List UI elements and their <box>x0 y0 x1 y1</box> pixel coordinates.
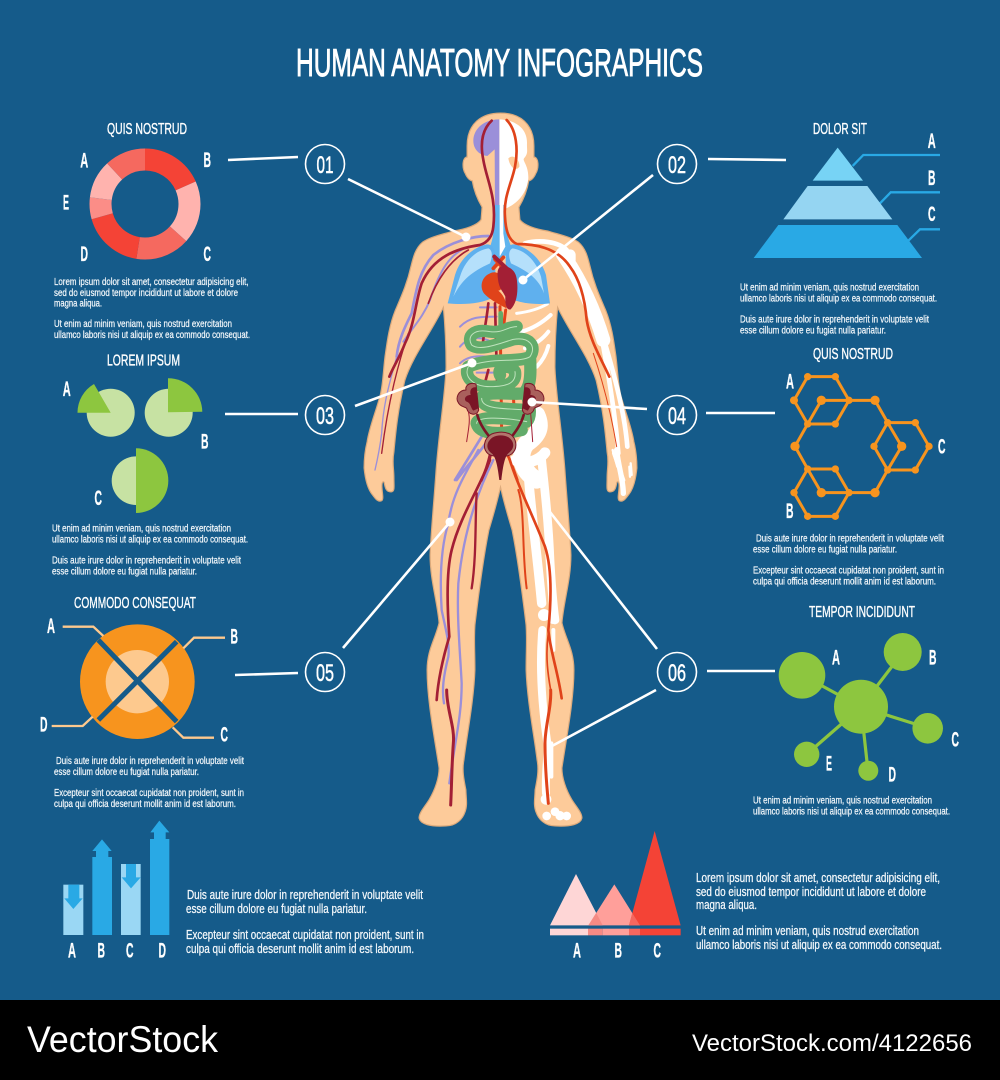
text block <box>186 888 424 956</box>
text block: Duis aute irure dolor in reprehenderit in voluptate velit <box>56 756 244 767</box>
body skin <box>365 114 636 825</box>
bar labels: B <box>98 940 105 962</box>
text block: Duis aute irure dolor in reprehenderit in voluptate velit <box>187 888 423 902</box>
panel: quis nostrud donut: C <box>204 243 211 266</box>
text block: esse cillum dolore eu fugiat nulla pariatur. <box>52 566 197 578</box>
triangle labels: B <box>614 940 622 962</box>
text block: magna aliqua. <box>696 898 757 912</box>
pyramid chart <box>754 148 940 258</box>
circle labels: C <box>220 724 228 746</box>
text block: Excepteur sint occaecat cupidatat non proident, sunt in <box>54 788 244 799</box>
text block: esse cillum dolore eu fugiat nulla pariatur. <box>186 902 367 916</box>
hexagon labels <box>786 370 946 523</box>
circle labels <box>40 615 238 746</box>
circle labels: A <box>47 615 55 638</box>
pie B <box>145 378 202 437</box>
footer watermark: VectorStock.com/4122656 <box>692 1030 972 1057</box>
text block: Excepteur sint occaecat cupidatat non proident, sunt in <box>753 566 944 576</box>
text block <box>54 277 250 341</box>
text block: Ut enim ad minim veniam, quis nostrud exercitation <box>54 319 232 330</box>
trunk vessels <box>460 307 498 383</box>
heading: COMMODO CONSEQUAT <box>74 595 196 612</box>
text block: culpa qui officia deserunt mollit anim id est laborum. <box>186 942 414 956</box>
left leg veins <box>441 450 478 703</box>
right leg arteries <box>509 458 562 698</box>
right arm bones <box>525 241 567 250</box>
bar labels: C <box>126 940 134 962</box>
upper body organs and vessels <box>375 119 632 480</box>
panel: tempor incididunt molecule <box>753 604 959 818</box>
text block: Ut enim ad minim veniam, quis nostrud exercitation <box>740 282 919 294</box>
text block: Excepteur sint occaecat cupidatat non proident, sunt in <box>186 928 424 942</box>
donut labels: E <box>63 192 69 214</box>
text block <box>54 756 244 810</box>
left arm arteries <box>389 121 494 377</box>
number badge 06 <box>658 652 696 692</box>
pie labels <box>63 378 209 510</box>
pyramid labels: A <box>928 130 936 153</box>
heading: QUIS NOSTRUD <box>107 121 187 138</box>
brain and purple vein <box>473 119 499 210</box>
connector 03 <box>225 358 476 414</box>
intestines <box>467 313 533 433</box>
heart <box>482 257 517 310</box>
text block: ullamco laboris nisi ut aliquip ex ea commodo consequat. <box>54 330 250 341</box>
molecule labels: D <box>888 764 896 786</box>
heading: DOLOR SIT <box>813 121 867 138</box>
connector lines and markers <box>225 157 786 746</box>
panel: dolor sit pyramid <box>740 121 940 336</box>
text block <box>696 871 942 952</box>
text block: sed do eiusmod tempor incididunt ut labore et dolore <box>696 885 926 899</box>
number badge 03: 03 <box>316 403 334 430</box>
connector 01 <box>228 157 470 242</box>
right lung <box>506 244 550 304</box>
title: HUMAN ANATOMY INFOGRAPHICS <box>296 42 703 85</box>
molecule labels: E <box>826 752 832 776</box>
panel: arrow bar chart: D <box>158 940 166 962</box>
heading: QUIS NOSTRUD <box>813 346 893 363</box>
quartered circle <box>52 624 225 739</box>
number badge 06: 06 <box>668 660 686 687</box>
left kidney <box>457 383 491 442</box>
skull bone <box>499 119 528 211</box>
spinal cord <box>488 205 513 260</box>
panel: triangle chart: C <box>654 940 661 962</box>
pelvis bone <box>522 415 539 480</box>
number badge 02: 02 <box>668 152 686 179</box>
panel: lorem ipsum pies <box>52 352 248 578</box>
panel: commodo consequat circle: B <box>230 626 238 648</box>
text block: sed do eiusmod tempor incididunt ut labore et dolore <box>54 288 238 299</box>
text block: esse cillum dolore eu fugiat nulla pariatur. <box>753 544 897 556</box>
number badge 03 <box>306 396 344 434</box>
left lung <box>448 244 495 304</box>
right arm arteries <box>505 120 609 377</box>
skull hole <box>508 157 519 169</box>
molecule diagram <box>779 633 943 781</box>
heading: TEMPOR INCIDIDUNT <box>809 604 915 621</box>
left arm veins <box>397 236 488 357</box>
text block <box>740 282 937 336</box>
ribs <box>517 304 547 313</box>
infographic canvas: C <box>952 728 959 752</box>
circle labels: D <box>40 714 48 736</box>
bar labels: A <box>68 940 76 962</box>
footer watermark: VectorStock <box>27 1019 218 1060</box>
hexagon labels: B <box>786 500 794 523</box>
molecule labels: A <box>832 646 840 670</box>
text block: Ut enim ad minim veniam, quis nostrud exercitation <box>52 524 231 534</box>
number badge 05 <box>306 652 344 692</box>
bar labels <box>68 940 166 962</box>
number badge 04 <box>658 396 696 434</box>
text block: Lorem ipsum dolor sit amet, consectetur adipisicing elit, <box>696 871 940 885</box>
panel: triangle chart <box>550 831 942 962</box>
text block: Duis aute irure dolor in reprehenderit in voluptate velit <box>52 556 241 566</box>
text block: Lorem ipsum dolor sit amet, consectetur adipisicing elit, <box>54 277 248 288</box>
text block <box>753 534 944 588</box>
hexagon labels: A <box>786 370 794 394</box>
number badge 02 <box>658 144 696 184</box>
panel: commodo consequat circle <box>40 595 244 810</box>
donut labels <box>63 149 211 266</box>
hexagon network <box>790 373 933 520</box>
right kidney <box>510 383 544 442</box>
lower body vessels and bones <box>437 450 630 820</box>
triangles and base bar <box>550 831 681 935</box>
number badge 01: 01 <box>316 152 334 179</box>
triangle labels <box>573 940 661 962</box>
text block: Ut enim ad minim veniam, quis nostrud exercitation <box>696 924 919 938</box>
infographic canvas: C <box>938 436 946 458</box>
right leg bones <box>515 450 630 820</box>
text block: esse cillum dolore eu fugiat nulla pariatur. <box>54 767 199 778</box>
text block: Duis aute irure dolor in reprehenderit in voluptate velit <box>740 314 929 326</box>
connector 04 <box>528 398 775 413</box>
panel: arrow bar chart <box>63 821 424 962</box>
panel: quis nostrud hexagons <box>753 346 946 588</box>
panel: quis nostrud donut <box>54 121 250 341</box>
pie labels: A <box>63 378 71 401</box>
bladder <box>484 432 516 480</box>
panel: lorem ipsum pies: B <box>201 430 208 454</box>
number badge 04: 04 <box>668 403 686 430</box>
text block: esse cillum dolore eu fugiat nulla pariatur. <box>740 326 886 336</box>
human body figure <box>365 114 636 825</box>
pie C <box>112 448 168 513</box>
text block <box>753 796 950 818</box>
number badge 05: 05 <box>316 660 334 687</box>
number badge 01 <box>306 144 344 184</box>
pyramid labels <box>928 130 936 226</box>
text block: ullamco laboris nisi ut aliquip ex ea commodo consequat. <box>52 534 248 546</box>
text block: ullamco laboris nisi ut aliquip ex ea commodo consequat. <box>740 294 937 304</box>
triangle labels: A <box>573 940 581 962</box>
text block: magna aliqua. <box>54 298 102 310</box>
pie A <box>78 384 135 437</box>
bars and arrows <box>63 821 169 935</box>
footer watermark <box>27 1019 972 1060</box>
donut labels: A <box>80 150 88 172</box>
connector 02 <box>518 159 786 284</box>
molecule labels: B <box>929 646 936 670</box>
heading: LOREM IPSUM <box>107 352 180 370</box>
connector 05 <box>235 518 454 675</box>
text block: Ut enim ad minim veniam, quis nostrud exercitation <box>753 796 932 806</box>
text block: Duis aute irure dolor in reprehenderit in voluptate velit <box>756 534 944 544</box>
text block: culpa qui officia deserunt mollit anim id est laborum. <box>54 799 236 810</box>
connector 06 <box>550 512 775 746</box>
body outline <box>365 114 636 825</box>
left leg arteries <box>437 460 490 700</box>
donut chart <box>100 160 190 248</box>
lower trunk vessels <box>455 433 492 480</box>
donut labels: D <box>80 243 88 266</box>
molecule labels <box>826 646 959 786</box>
pyramid labels: C <box>928 203 936 226</box>
panel: quis nostrud donut: B <box>204 149 211 172</box>
text block <box>52 524 248 578</box>
pyramid labels: B <box>928 167 936 190</box>
pie labels: C <box>94 487 102 510</box>
text block: culpa qui officia deserunt mollit anim id est laborum. <box>753 576 936 588</box>
text block: ullamco laboris nisi ut aliquip ex ea commodo consequat. <box>753 806 950 818</box>
